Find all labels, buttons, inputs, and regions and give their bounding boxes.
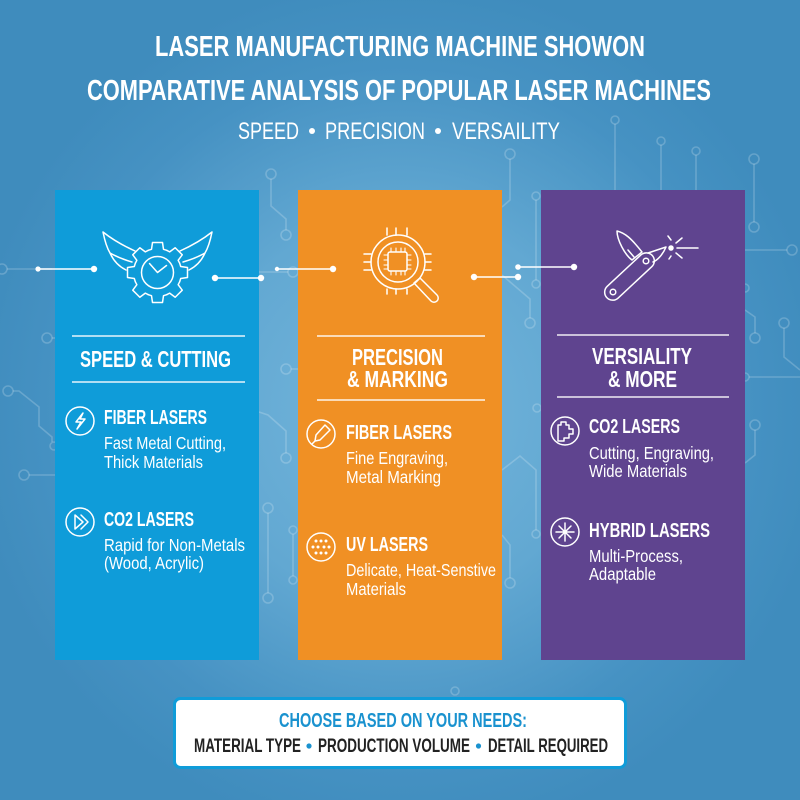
item: uv lasers: UV LASERS (346, 534, 428, 556)
subtitle: PRECISION (325, 118, 425, 145)
panel: precision and marking (298, 190, 502, 660)
item: fiber lasers (307, 420, 452, 487)
item: fiber lasers (66, 407, 226, 472)
callout criteria: PRODUCTION VOLUME (318, 735, 470, 757)
callout: choose based on your needs (174, 698, 626, 768)
panel: versatility and more (541, 190, 745, 660)
callout criteria: MATERIAL TYPE (194, 735, 301, 757)
item: fiber lasers: Metal Marking (346, 467, 441, 487)
icon: multi-tool knife with spark (601, 231, 698, 303)
panel heading: VERSIALITY (592, 343, 692, 369)
subtitle: SPEED (238, 118, 299, 145)
item: hybrid lasers: Multi-Process, (589, 546, 683, 566)
item: hybrid lasers (551, 518, 710, 584)
item: co2 lasers: Wide Materials (589, 461, 687, 481)
item: co2 lasers (551, 416, 714, 481)
item: hybrid lasers: HYBRID LASERS (589, 520, 710, 542)
callout criteria (194, 735, 608, 757)
item: fiber lasers: Fine Engraving, (346, 448, 448, 468)
callout heading: CHOOSE BASED ON YOUR NEEDS: (279, 710, 527, 732)
title block (87, 31, 711, 145)
panel heading: & MARKING (347, 366, 448, 392)
icon: winged gear with clock (103, 232, 212, 302)
subtitle: VERSAILITY (452, 118, 560, 145)
item: co2 lasers: Cutting, Engraving, (589, 443, 714, 463)
panel heading: & MORE (608, 366, 677, 392)
panel heading (347, 344, 448, 392)
item: fiber lasers: FIBER LASERS (346, 422, 452, 444)
item: co2 lasers (66, 508, 245, 573)
item: uv lasers: Materials (346, 579, 406, 599)
callout criteria: DETAIL REQUIRED (488, 735, 608, 757)
subtitle (238, 118, 560, 145)
icon: magnifier over chip (364, 228, 438, 302)
title line 1: LASER MANUFACTURING MACHINE SHOWON (155, 31, 645, 63)
panel heading (592, 343, 692, 392)
panel: speed and cutting (55, 190, 259, 660)
item: uv lasers: Delicate, Heat-Senstive (346, 560, 496, 580)
panel heading: PRECISION (352, 344, 443, 370)
item: co2 lasers: CO2 LASERS (104, 509, 194, 531)
panel heading: SPEED & CUTTING (80, 346, 231, 372)
item: fiber lasers: Fast Metal Cutting, (104, 433, 226, 453)
item: co2 lasers: CO2 LASERS (589, 416, 680, 438)
item: co2 lasers: Rapid for Non-Metals (104, 535, 245, 555)
item: hybrid lasers: Adaptable (589, 564, 656, 584)
item: co2 lasers: (Wood, Acrylic) (104, 553, 204, 573)
connector lines (35, 264, 577, 281)
item: fiber lasers: Thick Materials (104, 452, 203, 472)
item: uv lasers (307, 533, 496, 599)
item: fiber lasers: FIBER LASERS (104, 407, 207, 429)
